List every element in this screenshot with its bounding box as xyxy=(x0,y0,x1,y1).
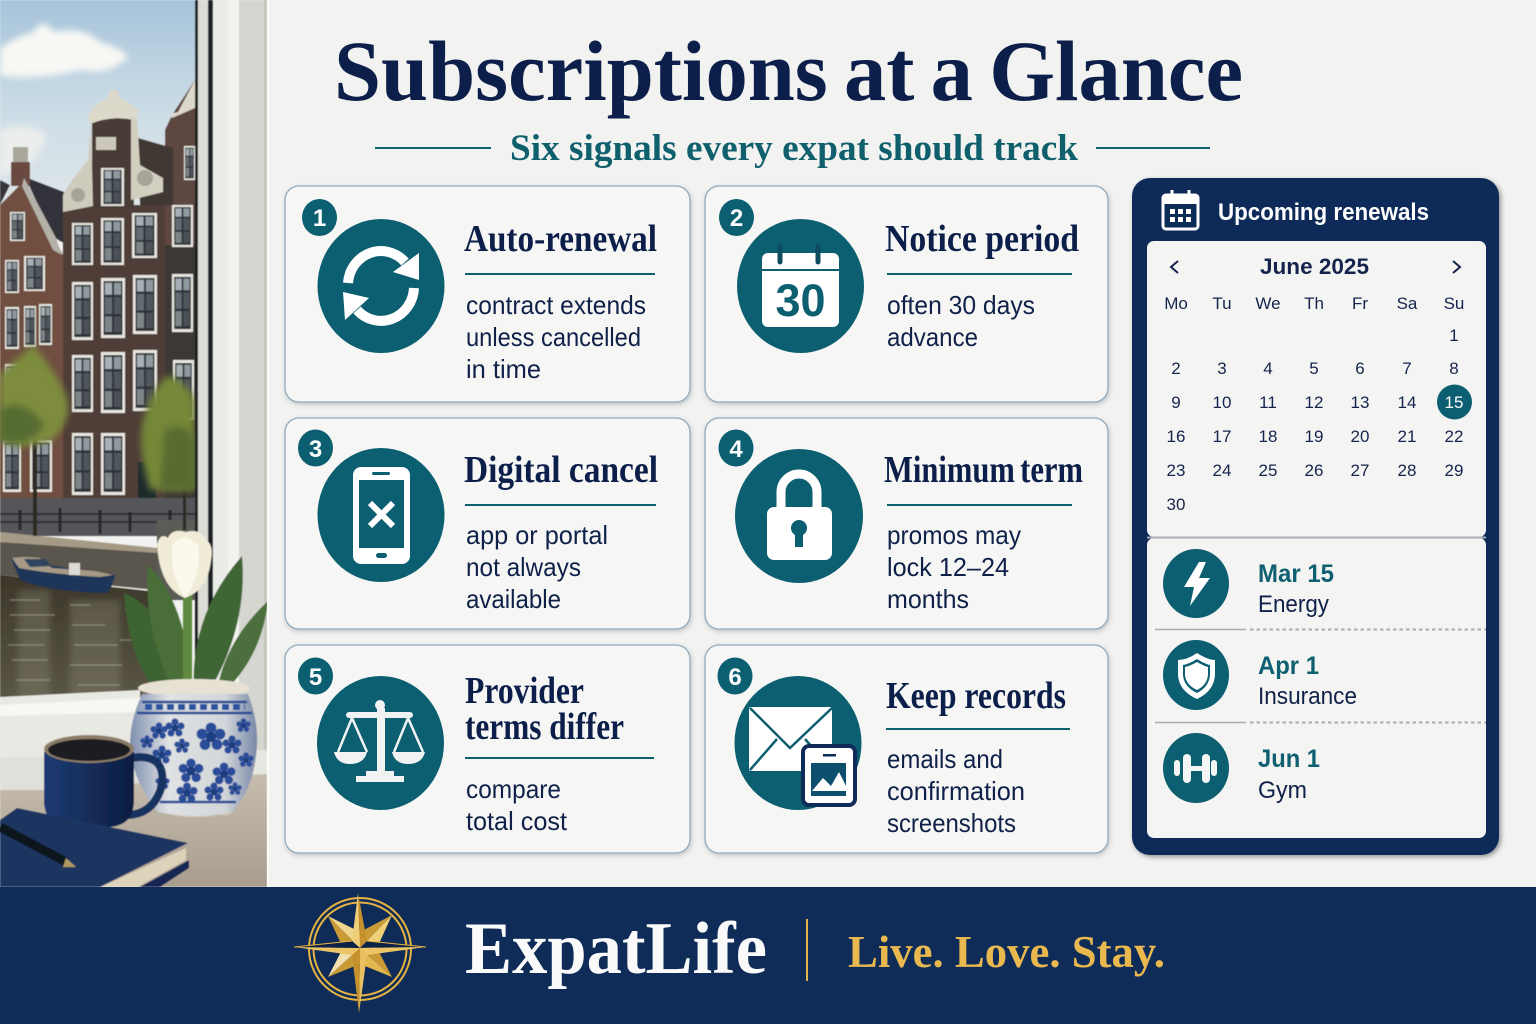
card 5: provider terms differ xyxy=(285,645,690,853)
body text: contract extends xyxy=(466,290,646,320)
heading: Notice period xyxy=(885,218,1079,260)
calendar: June 2025: 20 xyxy=(1351,427,1369,446)
calendar: June 2025: 29 xyxy=(1445,461,1463,480)
heading: Digital cancel xyxy=(464,449,658,491)
calendar: June 2025: 7 xyxy=(1402,359,1412,378)
calendar: June 2025: 17 xyxy=(1213,427,1231,446)
icon: calendar 30 xyxy=(737,219,864,353)
panel heading: Upcoming renewals xyxy=(1218,199,1429,226)
badge 5 xyxy=(298,658,333,694)
calendar: June 2025: Fr xyxy=(1352,294,1368,313)
calendar: June 2025: Sa xyxy=(1397,294,1418,313)
divider xyxy=(806,919,808,981)
icon: refresh xyxy=(318,219,444,353)
card 3: digital cancel xyxy=(285,418,690,629)
calendar: June 2025: 24 xyxy=(1213,461,1231,480)
calendar: June 2025: 14 xyxy=(1398,393,1416,412)
heading: Minimum term xyxy=(884,449,1083,491)
item: gym: Gym xyxy=(1258,777,1307,804)
calendar: June 2025: 26 xyxy=(1305,461,1323,480)
calendar: June 2025: 1 xyxy=(1449,326,1459,345)
brand name: ExpatLife xyxy=(465,908,767,990)
body text: in time xyxy=(466,354,541,384)
badge 3: 3 xyxy=(309,436,322,463)
window sill xyxy=(0,690,267,887)
navy mug xyxy=(44,735,162,827)
tulip in blue and white vase xyxy=(124,531,268,817)
icon: padlock xyxy=(735,449,863,583)
calendar: June 2025: 18 xyxy=(1259,427,1277,446)
card 1: auto-renewal xyxy=(285,186,690,402)
item: gym xyxy=(1163,733,1320,804)
calendar: June 2025: 4 xyxy=(1263,359,1273,378)
calendar: June 2025: Tu xyxy=(1212,294,1232,313)
calendar: June 2025: 11 xyxy=(1259,393,1277,412)
body text xyxy=(887,520,1021,614)
calendar: June 2025: 27 xyxy=(1351,461,1369,480)
calendar: June 2025: 5 xyxy=(1309,359,1319,378)
body text: emails and xyxy=(887,744,1003,774)
icon: phone with X xyxy=(318,448,444,582)
moored boat xyxy=(11,557,115,593)
badge 6 xyxy=(718,658,752,694)
badge 4 xyxy=(718,430,754,466)
body text: total cost xyxy=(466,806,568,836)
calendar: June 2025: 12 xyxy=(1305,393,1323,412)
centre gabled house xyxy=(63,90,173,524)
renewals list xyxy=(1147,536,1486,838)
body text: unless cancelled xyxy=(466,322,641,352)
heading: terms differ xyxy=(465,706,624,748)
window frame xyxy=(195,0,267,780)
badge 3 xyxy=(298,430,333,466)
body text: app or portal xyxy=(466,520,608,550)
icon: gold compass rose xyxy=(294,893,426,1013)
badge 2: 2 xyxy=(730,205,743,232)
footer band xyxy=(0,887,1536,1024)
calendar: June 2025: 30 xyxy=(1167,495,1185,514)
heading xyxy=(465,670,624,748)
subtitle with rules: Six signals every expat should track xyxy=(510,128,1078,169)
calendar: June 2025: 21 xyxy=(1398,427,1416,446)
calendar: June 2025 xyxy=(1147,241,1486,537)
item: insurance: Insurance xyxy=(1258,683,1357,710)
calendar: June 2025: We xyxy=(1255,294,1281,313)
calendar: June 2025: 2 xyxy=(1171,359,1181,378)
badge 4: 4 xyxy=(729,436,743,463)
body text xyxy=(466,290,646,384)
photo: Amsterdam canal view through window xyxy=(0,0,268,887)
sky with clouds xyxy=(0,0,197,240)
badge 1: 1 xyxy=(313,205,326,232)
heading: Auto-renewal xyxy=(464,218,657,260)
badge 5: 5 xyxy=(309,664,322,691)
calendar: June 2025: 3 xyxy=(1217,359,1227,378)
body text: confirmation xyxy=(887,776,1025,806)
card 2: notice period xyxy=(705,186,1108,402)
body text: often 30 days xyxy=(887,290,1035,320)
icon: calendar 30: 30 xyxy=(775,275,826,326)
water reflections xyxy=(8,590,150,697)
calendar: June 2025: 8 xyxy=(1449,359,1459,378)
calendar: June 2025: 25 xyxy=(1259,461,1277,480)
badge 1 xyxy=(302,199,337,236)
body text: months xyxy=(887,584,969,614)
body text xyxy=(887,744,1025,838)
item: insurance: Apr 1 xyxy=(1258,652,1319,680)
calendar: June 2025: 22 xyxy=(1445,427,1463,446)
body text: advance xyxy=(887,322,978,352)
calendar: June 2025: 16 xyxy=(1167,427,1185,446)
item: energy: Mar 15 xyxy=(1258,560,1334,588)
left brick house xyxy=(0,147,64,525)
calendar: June 2025: Mo xyxy=(1164,294,1188,313)
body text: not always xyxy=(466,552,581,582)
tagline: Live. Love. Stay. xyxy=(848,926,1165,977)
calendar: June 2025: 13 xyxy=(1351,393,1369,412)
body text: compare xyxy=(466,774,561,804)
right brick house xyxy=(163,80,195,515)
icon: header calendar xyxy=(1162,190,1199,229)
panel: upcoming renewals xyxy=(1132,178,1499,855)
calendar: June 2025: 28 xyxy=(1398,461,1416,480)
body text xyxy=(887,290,1035,352)
body text: available xyxy=(466,584,561,614)
calendar: June 2025: June 2025 xyxy=(1260,254,1369,279)
heading: Keep records xyxy=(886,675,1066,717)
icon: scales xyxy=(317,676,444,810)
calendar: June 2025: Th xyxy=(1304,294,1324,313)
body text xyxy=(466,774,568,836)
calendar: June 2025: 19 xyxy=(1305,427,1323,446)
body text: promos may xyxy=(887,520,1021,550)
card 6: keep records xyxy=(705,645,1108,853)
calendar: June 2025: 9 xyxy=(1171,393,1181,412)
trees xyxy=(0,345,195,536)
calendar: June 2025: 23 xyxy=(1167,461,1185,480)
calendar: June 2025: Su xyxy=(1444,294,1464,313)
badge 2 xyxy=(719,199,754,236)
calendar: June 2025: 6 xyxy=(1355,359,1365,378)
calendar: June 2025: 10 xyxy=(1213,393,1231,412)
street level and quay xyxy=(0,498,197,600)
body text: lock 12–24 xyxy=(887,552,1009,582)
white edge beside photo xyxy=(267,0,269,887)
icon: envelope and screenshot xyxy=(734,676,862,810)
item: energy xyxy=(1163,549,1334,618)
body text xyxy=(466,520,608,614)
item: gym: Jun 1 xyxy=(1258,745,1320,773)
notebook with pen xyxy=(0,808,189,887)
canal water xyxy=(0,575,157,697)
heading: Provider xyxy=(465,670,584,712)
title: Subscriptions at a Glance xyxy=(334,23,1243,119)
calendar: June 2025: 15 xyxy=(1445,393,1463,412)
badge 6: 6 xyxy=(728,664,742,691)
item: energy: Energy xyxy=(1258,591,1329,618)
card 4: minimum term xyxy=(705,418,1108,629)
item: insurance xyxy=(1163,640,1357,710)
body text: screenshots xyxy=(887,808,1016,838)
